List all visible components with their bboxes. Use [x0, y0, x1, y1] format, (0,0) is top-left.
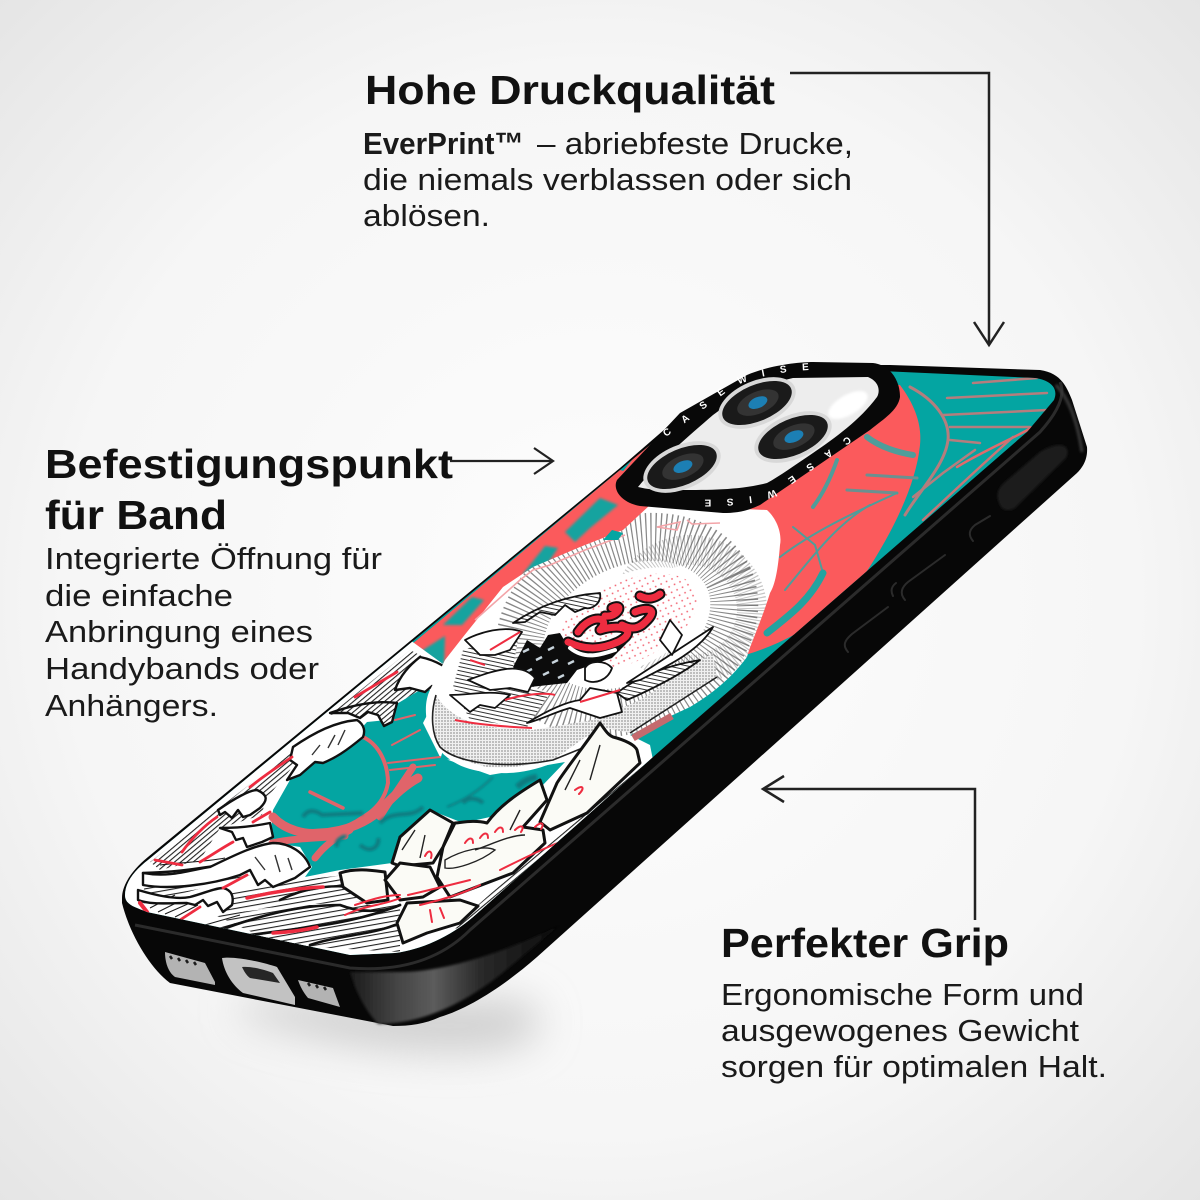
artwork: red streak right of petals [633, 716, 672, 738]
text block: strap description: Anbringung eines [45, 614, 313, 649]
arrow: print quality to phone [790, 73, 1004, 345]
artwork: coral branches [272, 715, 440, 858]
artwork: thick wave outlines [143, 866, 400, 945]
text block: EverPrint description: – abriebfeste Drucke, [537, 126, 853, 161]
text block: EverPrint description: die niemals verblassen oder sich [363, 162, 852, 197]
text block: grip description: sorgen für optimalen Halt. [721, 1049, 1107, 1084]
lens: right [747, 401, 839, 473]
artwork: sun rays [491, 503, 763, 747]
artwork: white lower area [110, 640, 655, 965]
artwork: teal window [270, 690, 565, 877]
text block: strap description [45, 541, 382, 723]
brand text on camera frame: CASEWISE [704, 437, 850, 506]
artwork: teal mark on disc edge [603, 530, 623, 540]
text block: EverPrint description: ablösen. [363, 198, 490, 233]
rim highlights [135, 382, 1082, 1024]
brand text on camera frame [663, 363, 850, 506]
camera interior [638, 377, 879, 490]
heading: Hohe Druckqualität: Hohe Druckqualität [365, 67, 775, 113]
bottom ports [165, 952, 340, 1007]
artwork: teal base [125, 371, 1056, 955]
artwork: blurred dark marks [303, 777, 537, 849]
text block: strap description: die einfache [45, 578, 233, 613]
artwork: wave crests [138, 657, 460, 912]
artwork: Om symbol [568, 594, 660, 655]
printed artwork [125, 371, 1056, 955]
heading: Befestigungspunkt für Band: Befestigungspunkt [45, 441, 453, 487]
artwork: white flecks [523, 647, 574, 678]
artwork: stippled moon [433, 653, 717, 767]
artwork: red disc lines [455, 632, 620, 728]
heading: Befestigungspunkt für Band [45, 441, 453, 538]
phone shadow [240, 1000, 540, 1052]
text block: grip description: ausgewogenes Gewicht [721, 1013, 1079, 1048]
lens: left [636, 431, 728, 503]
camera island [616, 362, 900, 513]
text block: grip description: Ergonomische Form und [721, 977, 1084, 1012]
text block: grip description [721, 977, 1107, 1084]
camera frame [616, 362, 900, 513]
artwork: teal blobs [415, 498, 618, 670]
artwork: moon outline [433, 677, 717, 764]
heading: Befestigungspunkt für Band: für Band [45, 492, 227, 538]
phone [122, 362, 1088, 1026]
side buttons [845, 516, 990, 652]
artwork: wave line work [150, 858, 255, 928]
artwork: lotus center and stamens [402, 745, 600, 868]
arrow: grip [763, 776, 975, 920]
artwork: arc and veins [767, 378, 1047, 633]
artwork: red strip beside disc [414, 470, 624, 664]
camera reflection [824, 385, 872, 425]
text block: EverPrint description: EverPrint™ [363, 126, 524, 161]
text block: strap description: Anhängers. [45, 688, 218, 723]
grip / strap slot [998, 445, 1068, 510]
text block: strap description: Integrierte Öffnung für [45, 541, 382, 576]
artwork: red circle [623, 384, 920, 654]
artwork: black night patch [513, 633, 627, 687]
artwork: big lotus [340, 723, 640, 943]
phone body [122, 365, 1087, 1026]
heading: Perfekter Grip: Perfekter Grip [721, 920, 1009, 966]
artwork: wave foam strokes [255, 730, 345, 872]
artwork: pink outlines [475, 520, 720, 620]
brand text on camera frame: CASEWISE [663, 363, 808, 436]
arrow: strap attachment [450, 448, 553, 474]
lens: top [711, 367, 803, 439]
text block: EverPrint description [363, 126, 853, 233]
artwork: hatched wave fills [140, 650, 655, 952]
artwork: hatched waves on disc [453, 630, 550, 727]
artwork: disc waves and lotus [450, 593, 713, 723]
artwork: white disc [426, 505, 780, 773]
text block: strap description: Handybands oder [45, 651, 319, 686]
artwork: red wave lines [140, 672, 397, 933]
